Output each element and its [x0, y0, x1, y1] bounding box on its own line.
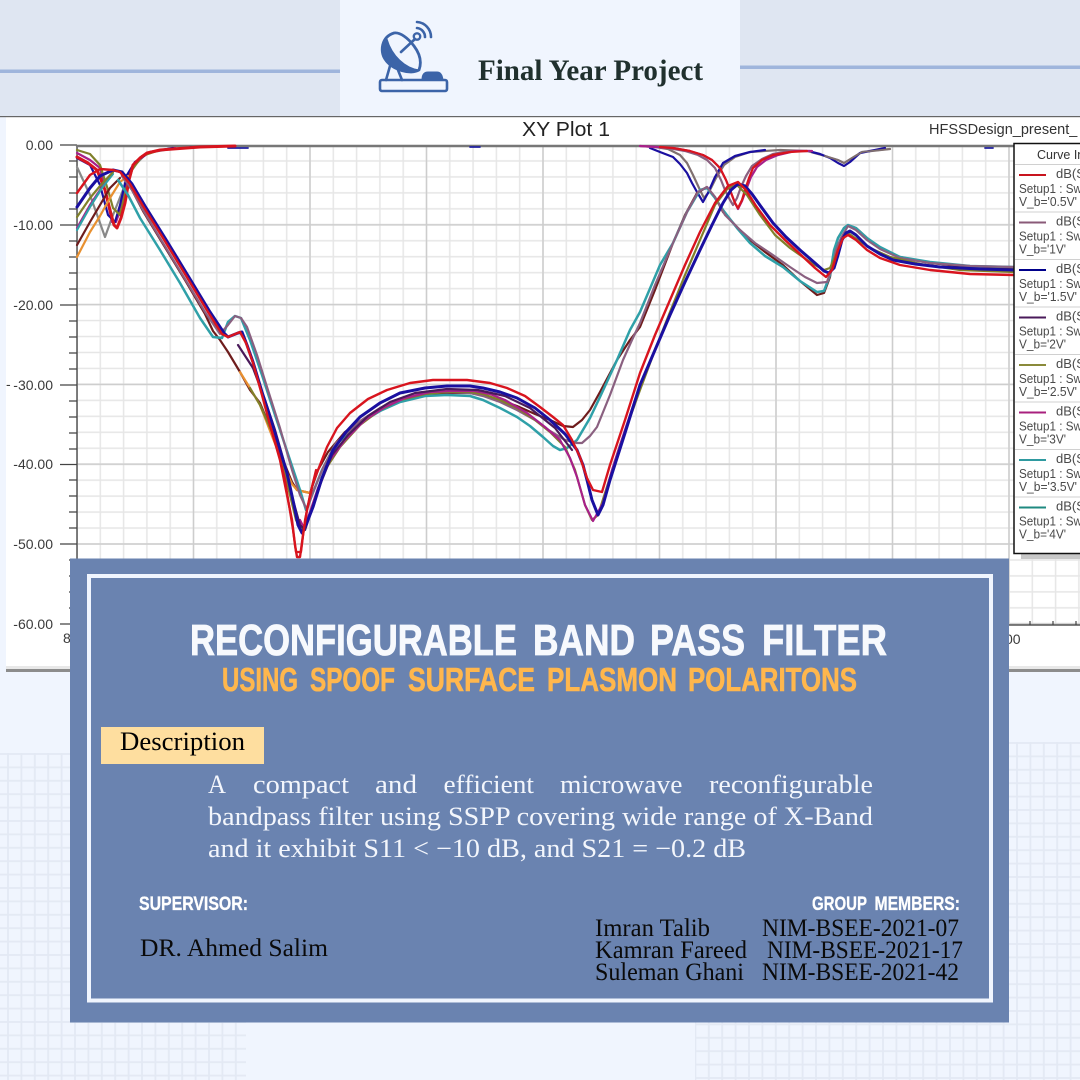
group members list: NIM-BSEE-2021-42 — [762, 959, 959, 986]
y axis labels: -60.00 — [13, 616, 53, 632]
description paragraph: microwave — [560, 770, 682, 799]
heading: Final Year Project: Final Year Project — [478, 55, 703, 87]
icon: satellite dish — [380, 22, 447, 91]
legend row: 2.5V — [1019, 356, 1080, 399]
chart design name: HFSSDesign_present_ — [929, 122, 1078, 138]
legend row: 4V — [1019, 498, 1080, 542]
header band left — [0, 0, 340, 116]
y axis labels: - — [6, 376, 11, 392]
legend row: 3.5V: V_b='3.5V' — [1019, 479, 1077, 494]
y axis labels: -30.00 — [13, 377, 53, 393]
description paragraph: compact — [253, 770, 350, 799]
description paragraph: efficient — [444, 770, 535, 799]
legend row: 2.5V: V_b='2.5V' — [1019, 384, 1077, 399]
legend row: 0.5V: V_b='0.5V' — [1019, 194, 1077, 209]
subtitle: POLARITONS — [688, 661, 857, 698]
legend row: 0.5V — [1019, 166, 1080, 209]
group members list: NIM-BSEE-2021-07 — [762, 915, 959, 942]
group members list: Imran Talib — [595, 915, 710, 942]
subtitle: USING — [222, 661, 298, 698]
chart title: XY Plot 1 — [522, 119, 610, 141]
description paragraph: and it exhibit S11 < −10 dB, and S21 = −0.2 dB — [208, 834, 746, 863]
legend row: 1V: V_b='1V' — [1019, 242, 1066, 256]
group members list — [595, 915, 963, 986]
description paragraph: bandpass filter using SSPP covering wide range of X-Band — [208, 802, 873, 831]
title: PASS — [650, 616, 745, 665]
y axis labels: -20.00 — [13, 297, 53, 313]
subtitle: PLASMON — [547, 661, 677, 698]
legend row: 3V: V_b='3V' — [1019, 432, 1066, 446]
subtitle: SURFACE — [408, 661, 535, 698]
y axis labels: 8 — [63, 630, 71, 646]
y axis labels: -50.00 — [13, 536, 53, 552]
legend row: 1.5V: V_b='1.5V' — [1019, 289, 1077, 304]
group members heading: GROUP — [812, 894, 867, 915]
panel: project details — [70, 558, 1009, 1022]
legend row: 3V — [1019, 404, 1080, 446]
group members list: Kamran Fareed — [595, 937, 747, 964]
legend row: 4V: V_b='4V' — [1019, 526, 1066, 542]
legend: curve info — [1014, 144, 1080, 559]
subtitle — [222, 661, 857, 698]
legend row: 3.5V — [1019, 451, 1080, 494]
description label — [101, 727, 264, 764]
y axis labels: -10.00 — [13, 217, 53, 233]
group members list: Suleman Ghani — [595, 959, 744, 986]
group members heading: MEMBERS: — [874, 894, 960, 915]
y axis labels — [6, 137, 1021, 647]
header band right — [740, 0, 1080, 116]
description paragraph — [208, 770, 873, 863]
legend row: 2V — [1019, 308, 1080, 352]
legend row: 1.5V — [1019, 261, 1080, 304]
subtitle: SPOOF — [310, 661, 395, 698]
title — [190, 616, 887, 665]
legend row: 1V — [1019, 214, 1080, 256]
title: RECONFIGURABLE — [190, 616, 517, 665]
legend row: 2V: V_b='2V' — [1019, 336, 1066, 352]
chart: XY Plot 1 screenshot — [0, 116, 1080, 672]
description paragraph: A — [208, 770, 226, 799]
group members list: NIM-BSEE-2021-17 — [767, 937, 963, 964]
title: FILTER — [762, 616, 887, 665]
group members heading — [812, 894, 960, 915]
y axis labels: 00 — [1005, 631, 1021, 647]
description label: Description — [120, 727, 245, 756]
supervisor heading: SUPERVISOR: — [139, 894, 248, 915]
description paragraph: reconfigurable — [709, 770, 873, 799]
description paragraph: and — [375, 770, 417, 799]
curves: S-parameter traces — [77, 146, 1014, 557]
title: BAND — [533, 616, 635, 665]
supervisor name: DR. Ahmed Salim — [140, 935, 329, 962]
y axis labels: 0.00 — [26, 137, 53, 153]
y axis labels: -40.00 — [13, 456, 53, 472]
